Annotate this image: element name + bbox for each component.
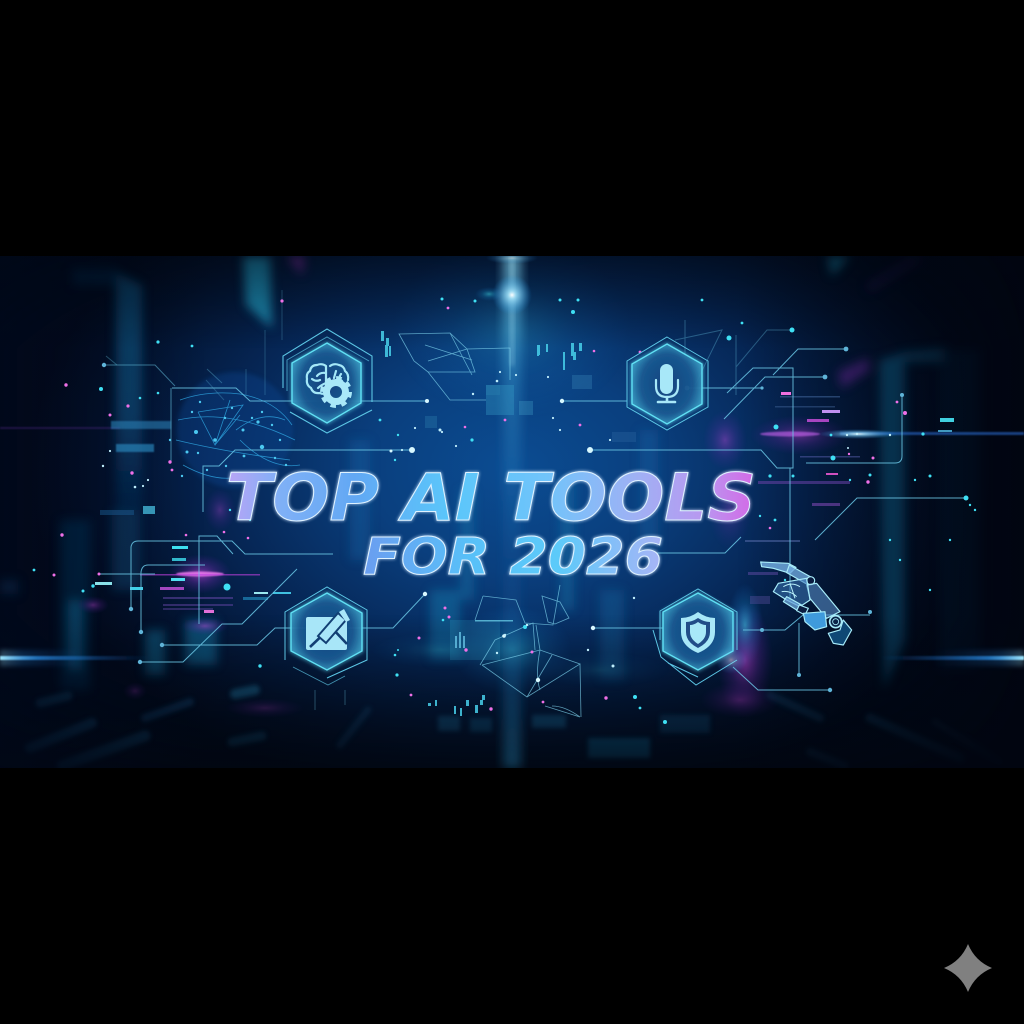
magenta and cyan glow blobs [81, 282, 838, 714]
icon: shield hexagon [653, 589, 747, 685]
blurred floor streaks [30, 690, 1000, 766]
network dots [33, 298, 976, 724]
holographic world globe [169, 372, 300, 488]
floor tiles [438, 715, 710, 758]
blurred city towers [0, 256, 980, 690]
banner [0, 240, 1024, 768]
title line one: TOP AI TOOLS [226, 461, 756, 536]
banner base gradient [0, 256, 1024, 768]
icon: robotic hand [761, 562, 852, 645]
vertical light beam [486, 252, 538, 768]
icon: microphone hexagon [627, 337, 708, 430]
title [226, 468, 756, 578]
side and top shading [0, 256, 1024, 768]
title line two: FOR 2026 [363, 528, 663, 587]
icon: brain and gear hexagon [283, 329, 372, 433]
faint data bars and grids [95, 375, 954, 660]
constellation wireframes [399, 333, 581, 717]
circuit lines [99, 290, 964, 710]
icon: four-point sparkle watermark [944, 944, 992, 992]
data column ticks [381, 331, 582, 716]
icon: image and pencil hexagon [285, 587, 367, 685]
horizontal lens flares [0, 427, 1024, 666]
